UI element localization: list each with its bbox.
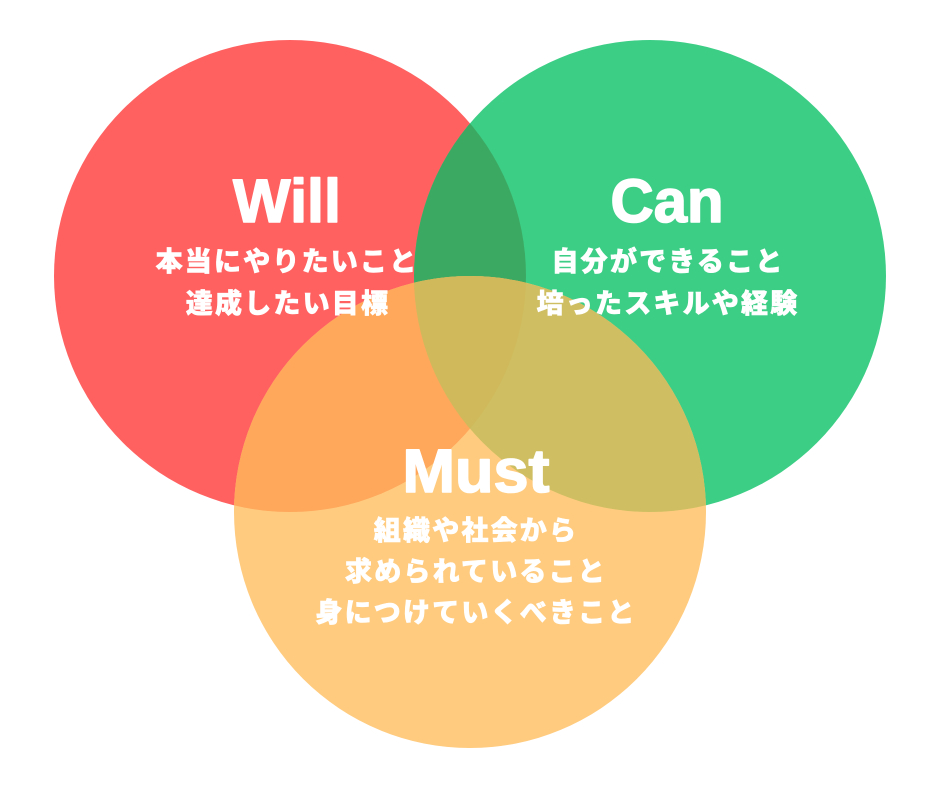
venn diagram <box>54 40 886 748</box>
heading: Must: Must <box>402 437 550 505</box>
text: Can description: 自分ができること <box>551 240 785 279</box>
text: Will description: 本当にやりたいこと <box>156 240 418 279</box>
circle: Will <box>54 40 526 512</box>
overlap: Will and Must <box>234 276 526 512</box>
text: Must description: 組織や社会から <box>374 509 578 548</box>
label: Must <box>315 437 637 630</box>
overlap: Can and Must <box>414 276 706 512</box>
text: Can description: 培ったスキルや経験 <box>537 282 799 321</box>
heading: Will: Will <box>233 167 341 235</box>
text: Must description: 求められていること <box>345 550 607 589</box>
overlap: Will and Can <box>414 124 526 283</box>
text: Will description <box>156 240 418 321</box>
text: Must description: 身につけていくべきこと <box>315 591 637 630</box>
text: Can description <box>537 240 799 321</box>
overlap: all three <box>414 276 525 428</box>
circle: Must <box>234 276 706 748</box>
circle: Can <box>414 40 886 512</box>
label: Will <box>156 167 418 321</box>
text: Must description <box>315 509 637 630</box>
heading: Can: Can <box>610 167 724 235</box>
text: Will description: 達成したい目標 <box>186 282 390 321</box>
label: Can <box>537 167 799 321</box>
